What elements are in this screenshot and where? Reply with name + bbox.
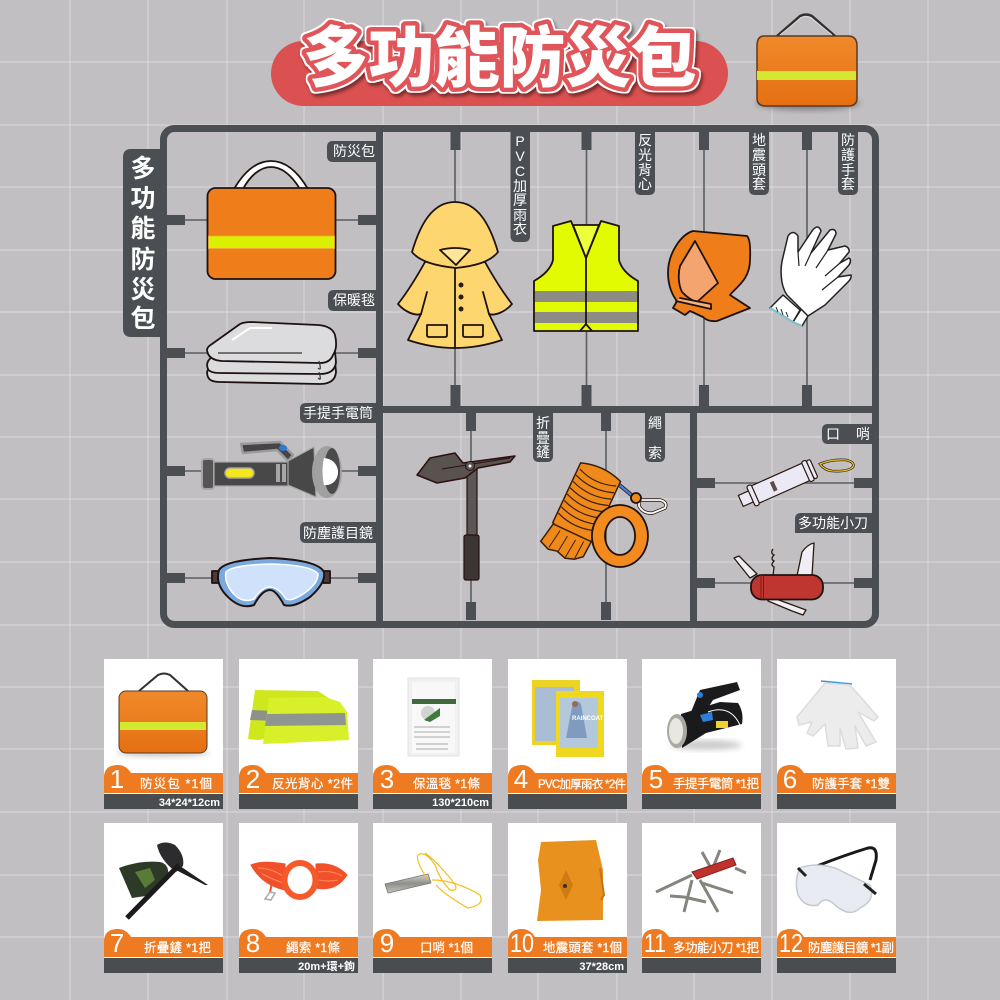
- icon: raincoat: [398, 202, 512, 348]
- runner frame: [164, 128, 876, 624]
- label: PVC加厚雨衣: PVC加厚雨衣: [513, 133, 527, 237]
- title text: 多功能防災包: [303, 21, 696, 95]
- photo: raincoat packs: [532, 680, 604, 757]
- photo: folded hood: [537, 840, 604, 921]
- product card 1: 防災包: 防災包 *1個: [140, 776, 212, 791]
- banner: [642, 929, 761, 957]
- photo: white gloves: [797, 681, 878, 749]
- icon: disaster bag: [208, 161, 336, 279]
- banner: [373, 929, 492, 957]
- orange ring: [592, 505, 648, 567]
- photo: folded vests: [248, 690, 349, 744]
- side title tag: 多功能防災包: [130, 155, 156, 333]
- product card 4: PVC加厚雨衣: 4: [514, 764, 528, 794]
- banner: [104, 765, 223, 793]
- product card 9: 口哨: 9: [380, 928, 394, 958]
- product card 12: 防塵護目鏡: [777, 823, 896, 973]
- product card 9: 口哨: 口哨 *1個: [420, 940, 473, 955]
- banner: [508, 765, 627, 793]
- banner: [508, 929, 627, 957]
- photo: blanket package: [408, 678, 459, 756]
- product card 1: 防災包: 34*24*12cm: [159, 797, 220, 809]
- product card 6: 防護手套: [777, 659, 896, 809]
- title banner: [271, 21, 728, 106]
- label: 防護手套: 防護手套: [841, 132, 855, 192]
- icon: flashlight: [202, 442, 342, 498]
- icon: reflective vest: [534, 221, 638, 331]
- label: 保暖毯: 保暖毯: [333, 292, 375, 308]
- label: 折疊鏟: 折疊鏟: [536, 415, 550, 460]
- photo: safety goggles: [796, 848, 876, 912]
- product card 8: 繩索: 8: [246, 928, 260, 958]
- photo: orange rope: [251, 862, 347, 900]
- icon: blanket: [207, 322, 336, 384]
- product card 10: 地震頭套: 10: [510, 928, 534, 958]
- product card 7: 折疊鏟: [104, 823, 223, 973]
- icon: goggles: [212, 558, 330, 606]
- label: 折疊鏟: [533, 413, 553, 462]
- product card 12: 防塵護目鏡: 12: [779, 928, 803, 958]
- product card 3: 保溫毯: 130*210cm: [432, 797, 489, 809]
- product card 11: 多功能小刀: 多功能小刀 *1把: [673, 941, 759, 955]
- product card 4: PVC加厚雨衣: [508, 659, 627, 809]
- product card 8: 繩索: 繩索 *1條: [286, 941, 340, 955]
- product card 6: 防護手套: 6: [783, 764, 797, 794]
- product card 8: 繩索: [239, 823, 358, 973]
- label: 口哨: 口哨: [826, 426, 870, 442]
- product card 7: 折疊鏟: 7: [110, 928, 124, 958]
- icon: gloves: [770, 227, 851, 326]
- icon: earthquake hood: [668, 231, 750, 321]
- product card 1: 防災包: [104, 659, 223, 809]
- product card 5: 手提手電筒: 手提手電筒 *1把: [673, 776, 759, 791]
- side title tag: [123, 149, 160, 337]
- product card 11: 多功能小刀: [642, 823, 761, 973]
- label: 地震頭套: 地震頭套: [752, 132, 766, 192]
- product card 2: 反光背心: 2: [246, 764, 260, 794]
- product card 12: 防塵護目鏡: 防塵護目鏡 *1副: [808, 940, 894, 955]
- photo: flashlight: [667, 682, 742, 750]
- product card 6: 防護手套: 防護手套 *1雙: [812, 776, 890, 791]
- product card 4: PVC加厚雨衣: PVC加厚雨衣 *2件: [538, 777, 626, 791]
- product card 3: 保溫毯: 保溫毯 *1條: [413, 777, 480, 791]
- label: 防災包: [327, 141, 376, 162]
- label: 地震頭套: [749, 132, 769, 195]
- photo: shovel and camo pouch: [119, 842, 208, 918]
- label: 反光背心: 反光背心: [638, 132, 652, 192]
- label: 繩索: [645, 413, 665, 462]
- icon: rope with ring: [539, 458, 666, 567]
- label: 多功能小刀: 多功能小刀: [798, 515, 868, 531]
- product card 3: 保溫毯: [373, 659, 492, 809]
- label: 防塵護目鏡: 防塵護目鏡: [303, 525, 373, 541]
- product card 11: 多功能小刀: 11: [644, 928, 666, 958]
- product card 10: 地震頭套: 地震頭套 *1個: [543, 940, 622, 955]
- label: 繩索: 繩索: [648, 415, 662, 461]
- photo: whistle with lanyard: [385, 853, 481, 908]
- banner: [239, 929, 358, 957]
- label: PVC加厚雨衣: [510, 132, 530, 242]
- rope coil: [539, 458, 622, 566]
- photo: multi tool: [656, 850, 746, 912]
- product card 2: 反光背心: [239, 659, 358, 809]
- product card 10: 地震頭套: [508, 823, 627, 973]
- icon: whistle: [736, 458, 853, 511]
- product card 5: 手提手電筒: [642, 659, 761, 809]
- product card 8: 繩索: 20m+環+鉤: [298, 959, 355, 973]
- label: 手提手電筒: 手提手電筒: [303, 405, 373, 421]
- label: 反光背心: [635, 132, 655, 195]
- product card 3: 保溫毯: 3: [380, 764, 394, 794]
- banner: [104, 929, 223, 957]
- banner: [373, 765, 492, 793]
- label: 保暖毯: [328, 290, 376, 311]
- blue cord and carabiner: [617, 483, 666, 513]
- photo: raincoat packs: RAINCOAT: [572, 716, 604, 722]
- banner: [239, 765, 358, 793]
- product card 10: 地震頭套: 37*28cm: [579, 961, 624, 973]
- product card 5: 手提手電筒: 5: [649, 764, 663, 794]
- photo: bag: [117, 674, 209, 757]
- icon: folding shovel: [417, 453, 515, 580]
- product card 2: 反光背心: 反光背心 *2件: [272, 777, 353, 791]
- banner: [777, 929, 896, 957]
- banner: [777, 765, 896, 793]
- product card 1: 防災包: 1: [110, 764, 124, 794]
- title pill: [271, 41, 728, 106]
- label: 防護手套: [838, 132, 858, 195]
- banner: [642, 765, 761, 793]
- icon: multi tool knife: [734, 543, 823, 615]
- product card 9: 口哨: [373, 823, 492, 973]
- product card 7: 折疊鏟: 折疊鏟 *1把: [144, 940, 211, 955]
- photo: disaster bag top right: [756, 14, 860, 110]
- label: 防災包: 防災包: [333, 143, 375, 159]
